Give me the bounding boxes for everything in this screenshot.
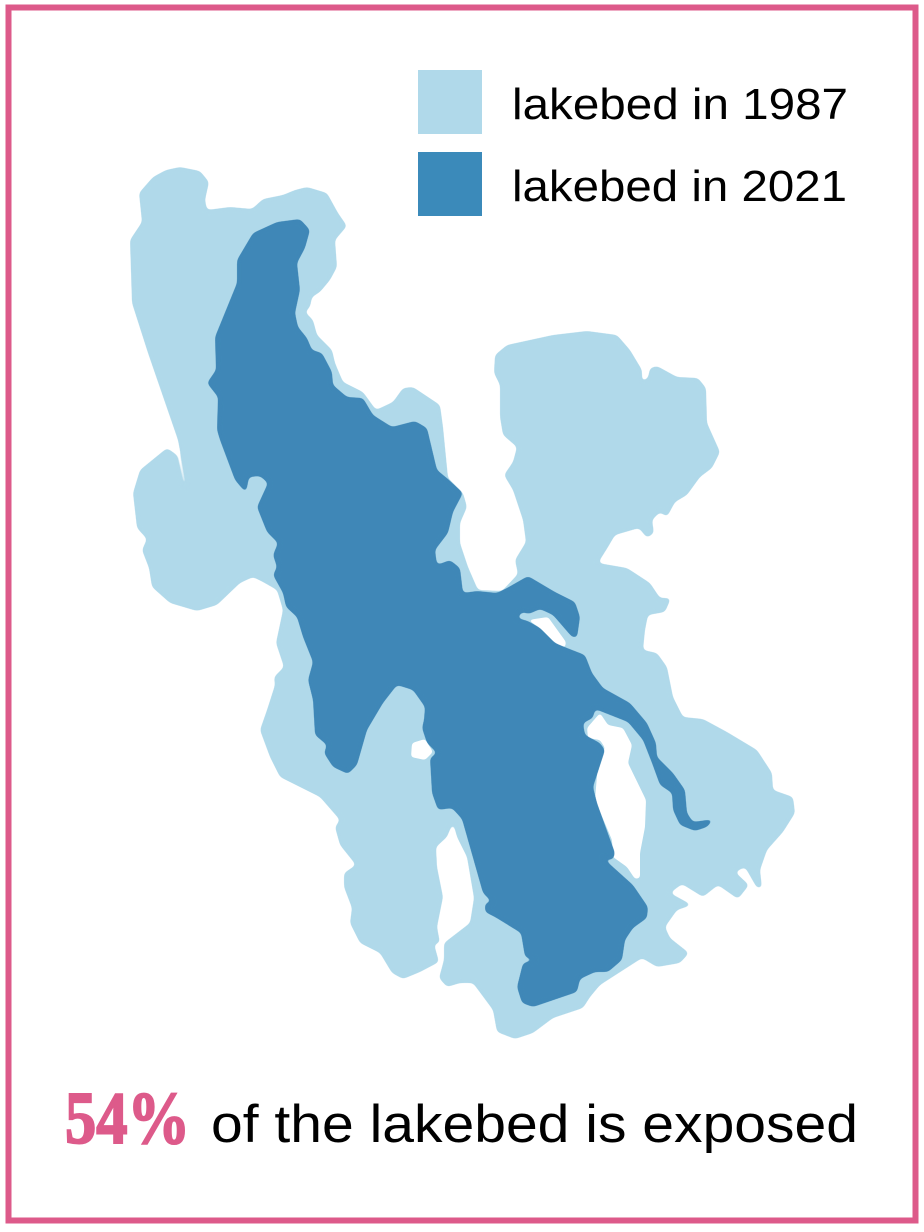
legend (418, 70, 848, 216)
caption text: of the lakebed is exposed (211, 1095, 858, 1154)
caption (65, 1078, 858, 1160)
legend swatch: 2021 (418, 152, 482, 216)
lakebed in 2021 shape (207, 219, 714, 1007)
map: lakebed extents (130, 167, 795, 1039)
statistic: 54%: 54% (65, 1078, 190, 1160)
lakebed in 1987 shape (130, 167, 795, 1039)
legend label: 1987: lakebed in 1987 (512, 80, 848, 129)
legend label: 2021: lakebed in 2021 (512, 162, 847, 211)
legend swatch: 1987 (418, 70, 482, 134)
exposed islands (411, 617, 646, 879)
